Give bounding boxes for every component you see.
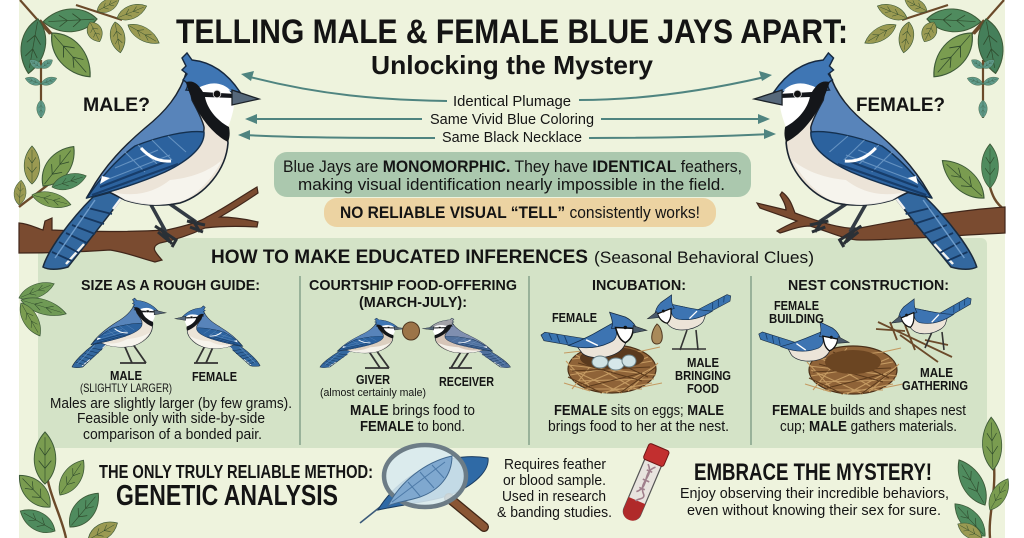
- subtitle: Unlocking the Mystery: [371, 50, 654, 80]
- icon: female building: [756, 314, 851, 367]
- comparison labels: Same Vivid Blue Coloring: [430, 111, 594, 128]
- text: incubation description: brings food to her at the nest.: [548, 418, 729, 435]
- icon: eggs: [592, 355, 636, 370]
- text: nest description: [772, 402, 967, 435]
- text: sample requirements: Used in research: [502, 489, 606, 505]
- section heading: incubation: INCUBATION:: [592, 277, 686, 294]
- callout: monomorphic: Blue Jays are MONOMORPHIC. They have IDENTICAL feathers,: [283, 157, 742, 176]
- comparison labels: [430, 93, 594, 146]
- handle: [449, 498, 484, 527]
- text: sample requirements: [497, 457, 612, 521]
- label: female building: [769, 298, 824, 326]
- section heading: size: SIZE AS A ROUGH GUIDE:: [81, 277, 260, 294]
- icon: male gathering: [887, 281, 977, 350]
- icon: empty nest: [805, 346, 903, 394]
- text: courtship description: FEMALE to bond.: [360, 418, 465, 435]
- text: size description: [50, 395, 292, 443]
- text: incubation description: FEMALE sits on eggs; MALE: [554, 402, 724, 419]
- foliage: bottom right: [948, 417, 1014, 538]
- section heading: courtship: COURTSHIP FOOD-OFFERING: [309, 277, 517, 294]
- heading: educated inferences: (Seasonal Behavioral Clues): [594, 248, 814, 267]
- text: sample requirements: or blood sample.: [503, 473, 606, 489]
- icon: male bringing food: [643, 278, 737, 350]
- text: embrace the mystery: EMBRACE THE MYSTERY!: [694, 459, 932, 486]
- feather: [360, 457, 488, 523]
- branch: left: [19, 187, 258, 262]
- bird: female? right jay: [754, 53, 977, 269]
- callout: no reliable tell: NO RELIABLE VISUAL “TELL” consistently works!: [340, 203, 700, 222]
- callout: monomorphic: [274, 152, 751, 197]
- label: female?: FEMALE?: [856, 95, 945, 116]
- text: nest description: FEMALE builds and shapes nest: [772, 402, 967, 419]
- label: male: [80, 368, 172, 395]
- label: female building: FEMALE: [774, 298, 819, 313]
- label: female building: BUILDING: [769, 311, 824, 326]
- branch: right: [757, 192, 1005, 240]
- section: size as a rough guide: [50, 277, 292, 443]
- label: male?: MALE?: [83, 95, 150, 116]
- foliage: right middle: [935, 144, 1005, 210]
- icon: incubating female jay: [541, 312, 647, 358]
- label: male gathering: [902, 365, 968, 393]
- text: incubation description: [548, 402, 729, 435]
- section: incubation: [541, 277, 737, 435]
- heading: genetic analysis: GENETIC ANALYSIS: [116, 480, 338, 512]
- text: embrace the mystery: Enjoy observing their incredible behaviors,: [680, 486, 949, 502]
- label: female: FEMALE: [552, 310, 597, 325]
- section heading: nest construction: NEST CONSTRUCTION:: [788, 277, 949, 294]
- label: male bringing food: BRINGING: [675, 368, 731, 383]
- bird: male? left jay: [43, 53, 259, 269]
- text: size description: Feasible only with side-by-side: [77, 410, 265, 427]
- section: courtship food-offering: [309, 277, 517, 435]
- heading: educated inferences: HOW TO MAKE EDUCATED INFERENCES: [211, 247, 588, 268]
- label: male bringing food: [675, 355, 731, 396]
- label: male: MALE: [110, 368, 142, 383]
- section heading: courtship: [309, 277, 517, 311]
- label: male gathering: MALE: [920, 365, 953, 380]
- label: giver: [320, 372, 426, 399]
- foliage: left of panel: [15, 278, 68, 340]
- text: courtship description: MALE brings food to: [350, 402, 475, 419]
- label: receiver: RECEIVER: [439, 374, 494, 389]
- callout: no reliable tell: [324, 198, 716, 227]
- title: TELLING MALE & FEMALE BLUE JAYS APART:: [176, 13, 848, 51]
- label: female: FEMALE: [192, 369, 237, 384]
- panel: seasonal behavioral clues: [38, 238, 987, 448]
- foliage: top left: [17, 0, 162, 118]
- text: sample requirements: & banding studies.: [497, 505, 612, 521]
- text: sample requirements: Requires feather: [504, 457, 606, 473]
- foliage: bottom left: [12, 432, 121, 538]
- heading: educated inferences: [211, 247, 814, 268]
- text: nest description: cup; MALE gathers materials.: [780, 418, 957, 435]
- icon: small female jay: [175, 306, 260, 366]
- icon: small male jay: [72, 298, 166, 368]
- icon: nest: [564, 345, 662, 393]
- icon: giver jay: [320, 318, 405, 368]
- text: size description: comparison of a bonded pair.: [83, 426, 262, 443]
- comparison labels: Same Black Necklace: [442, 129, 582, 146]
- arrows from labels to both birds: [238, 71, 776, 140]
- icon: blood test tube with DNA: [619, 443, 670, 524]
- foliage: top right: [862, 0, 1007, 118]
- foliage: left middle: [13, 140, 88, 212]
- comparison labels: Identical Plumage: [453, 93, 571, 110]
- callout: monomorphic: making visual identification nearly impossible in the field.: [298, 175, 725, 194]
- text: size description: Males are slightly larger (by few grams).: [50, 395, 292, 412]
- label: giver: GIVER: [356, 372, 391, 387]
- heading: genetic analysis: THE ONLY TRULY RELIABLE METHOD:: [99, 462, 373, 482]
- label: male bringing food: FOOD: [687, 381, 719, 396]
- icon: nut: [402, 322, 420, 340]
- text: embrace the mystery: [680, 459, 949, 519]
- icon: magnifying glass over feather: [360, 445, 488, 527]
- text: embrace the mystery: even without knowing their sex for sure.: [687, 503, 941, 519]
- heading: genetic analysis: [99, 462, 373, 512]
- icon: twigs: [876, 322, 952, 362]
- section heading: courtship: (MARCH-JULY):: [359, 294, 467, 311]
- label: male bringing food: MALE: [687, 355, 719, 370]
- label: male gathering: GATHERING: [902, 378, 968, 393]
- label: male: (SLIGHTLY LARGER): [80, 381, 172, 395]
- section: nest construction: [756, 277, 977, 435]
- text: courtship description: [350, 402, 475, 435]
- icon: receiver jay: [423, 318, 510, 368]
- label: giver: (almost certainly male): [320, 387, 426, 399]
- lens: [384, 445, 466, 507]
